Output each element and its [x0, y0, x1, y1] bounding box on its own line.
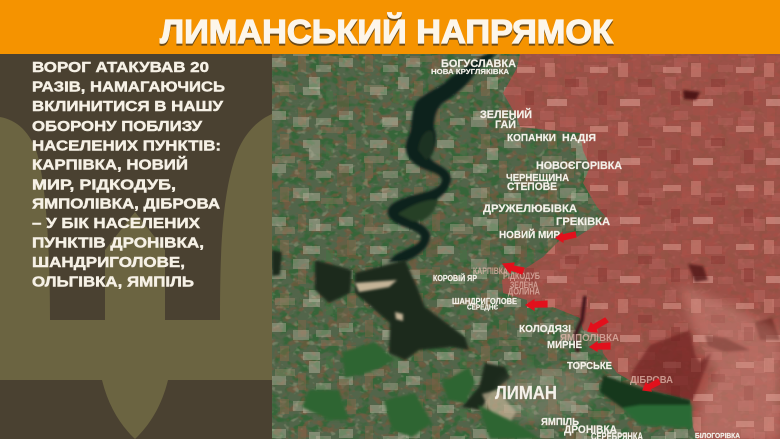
- panel text: attack summary: ОЛЬГІВКА, ЯМПІЛЬ: [32, 274, 194, 290]
- panel text: attack summary: ШАНДРИГОЛОВЕ,: [32, 255, 185, 271]
- place labels: ЯМПІЛЬ: [541, 417, 579, 428]
- left panel: olive background with trident emblem: [0, 54, 272, 439]
- place labels: ЛИМАН: [495, 383, 557, 403]
- satellite map: [272, 54, 780, 439]
- place labels: СЕРЕДНЄ: [467, 302, 499, 312]
- place labels: ЗЕЛЕНИЙ: [480, 108, 532, 121]
- place labels: ЗЕЛЕНА: [510, 280, 538, 290]
- river in occupied zone: [575, 296, 585, 352]
- panel text: attack summary: [32, 60, 225, 290]
- place labels: ГАЙ: [495, 118, 516, 131]
- place labels: КАРПІВКА: [473, 266, 508, 276]
- panel text: attack summary: ВОРОГ АТАКУВАВ 20: [32, 60, 209, 76]
- place labels: [431, 58, 741, 439]
- place labels: КОЛОДЯЗІ: [519, 323, 571, 335]
- place labels: ДІБРОВА: [630, 375, 673, 386]
- place labels: ЧЕРНЕЩИНА: [506, 173, 569, 184]
- occupied woodland, darker: [630, 330, 712, 400]
- green woodland: [302, 342, 540, 439]
- place labels: ДРУЖЕЛЮБІВКА: [483, 203, 577, 215]
- title shadow: ЛИМАНСЬКИЙ НАПРЯМОК: [160, 14, 614, 52]
- pale lowland in the south-east: [680, 285, 780, 439]
- place labels: ГРЕКІВКА: [556, 216, 610, 228]
- place labels: НОВОЄГОРІВКА: [536, 160, 622, 172]
- place labels: НОВИЙ МИР: [499, 228, 560, 241]
- red attack arrows: [503, 232, 660, 391]
- dark forest blocks: [272, 250, 510, 410]
- place labels: КОПАНКИ: [507, 133, 556, 144]
- trident emblem watermark: [0, 114, 272, 439]
- place labels: ДОЛИНА: [508, 286, 540, 296]
- Lyman town area: [500, 369, 594, 420]
- panel text: attack summary: МИР, РІДКОДУБ,: [32, 178, 176, 194]
- panel text: attack summary: ОБОРОНУ ПОБЛИЗУ: [32, 119, 203, 135]
- green forest south of the front line: [600, 375, 692, 428]
- reservoir and river: [388, 54, 496, 262]
- panel text: attack summary: – У БІК НАСЕЛЕНИХ: [32, 216, 200, 232]
- place labels: НАДІЯ: [562, 133, 596, 144]
- occupied field pattern: [500, 54, 780, 439]
- place labels: КОРОВІЙ ЯР: [433, 274, 478, 283]
- place labels: ДРОНІВКА: [564, 424, 617, 436]
- place labels: МИРНЕ: [547, 340, 582, 351]
- panel text: attack summary: ПУНКТІВ ДРОНІВКА,: [32, 236, 204, 252]
- place labels: ЯМПОЛІВКА: [560, 332, 619, 344]
- occupied territory: red overlay: [500, 54, 780, 439]
- panel text: attack summary: КАРПІВКА, НОВИЙ: [32, 156, 188, 174]
- title: ЛИМАНСЬКИЙ НАПРЯМОК: [160, 12, 614, 50]
- place labels: НОВА КРУГЛЯКІВКА: [431, 67, 510, 76]
- header banner: [0, 0, 780, 54]
- place labels: ТОРСЬКЕ: [567, 361, 612, 372]
- place labels: РІДКОДУБ: [503, 271, 540, 281]
- panel text: attack summary: НАСЕЛЕНИХ ПУНКТІВ:: [32, 138, 221, 154]
- place labels: БОГУСЛАВКА: [441, 58, 516, 70]
- place labels: СТЕПОВЕ: [507, 181, 557, 193]
- panel text: attack summary: ЯМПОЛІВКА, ДІБРОВА: [32, 196, 221, 212]
- sand quarry patches: [355, 280, 516, 426]
- place labels: ШАНДРИГОЛОВЕ: [452, 296, 517, 306]
- panel text: attack summary: ВКЛИНИТИСЯ В НАШУ: [32, 99, 224, 115]
- panel text: attack summary: РАЗІВ, НАМАГАЮЧИСЬ: [32, 80, 225, 96]
